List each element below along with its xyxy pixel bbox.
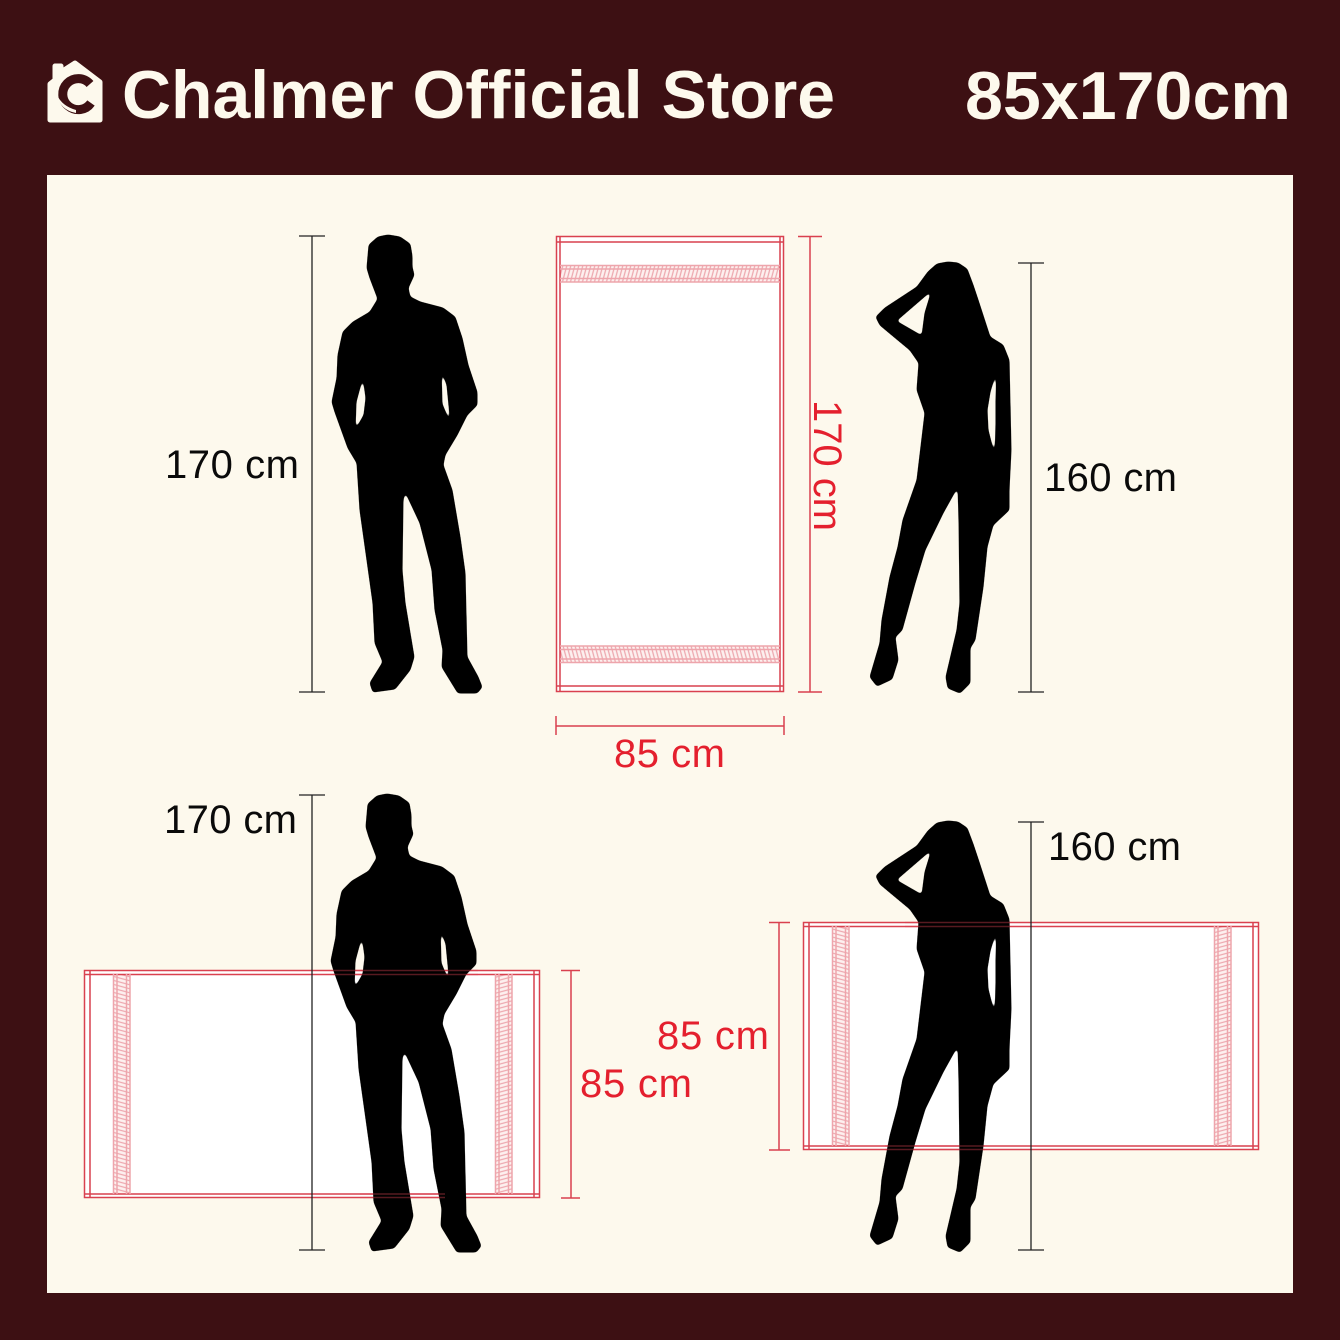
label: woman height: 160 cm (1044, 456, 1177, 500)
label: man height: 170 cm (165, 443, 299, 487)
towel left dimension (561, 970, 692, 1198)
woman height dimension bottom (1018, 822, 1181, 1250)
logo: house with C (50, 63, 100, 120)
towel edge over man (333, 970, 478, 1198)
label: left towel width: 85 cm (580, 1062, 692, 1106)
woman silhouette top (870, 262, 1011, 693)
label: right towel width: 85 cm (657, 1014, 769, 1058)
label: towel height: 170 cm (805, 400, 849, 531)
panel: cream background (47, 175, 1293, 1293)
towel horizontal left (84, 970, 540, 1198)
towel width dimension (556, 716, 784, 776)
towel vertical (556, 236, 784, 692)
man silhouette top (332, 235, 482, 693)
label: woman height bottom: 160 cm (1048, 825, 1181, 869)
woman height dimension top (1018, 263, 1177, 692)
label: man height bottom: 170 cm (164, 798, 297, 842)
stripe right (495, 974, 512, 1194)
towel stripe top (560, 265, 780, 282)
brand title: Chalmer Official Store (122, 57, 835, 133)
man height dimension top (165, 236, 325, 692)
stripe left (113, 974, 130, 1194)
towel horizontal right (804, 922, 1258, 1150)
stripe right (1214, 926, 1231, 1146)
towel right dimension (657, 922, 790, 1150)
towel edge over woman (885, 922, 1010, 1150)
towel height dimension (798, 236, 849, 692)
stripe left (832, 926, 849, 1146)
man height dimension bottom (164, 795, 325, 1250)
towel stripe bottom (560, 646, 780, 663)
size title: 85x170cm (965, 58, 1291, 134)
man silhouette bottom (331, 794, 481, 1252)
woman silhouette bottom (870, 821, 1011, 1252)
label: towel width: 85 cm (614, 732, 725, 776)
